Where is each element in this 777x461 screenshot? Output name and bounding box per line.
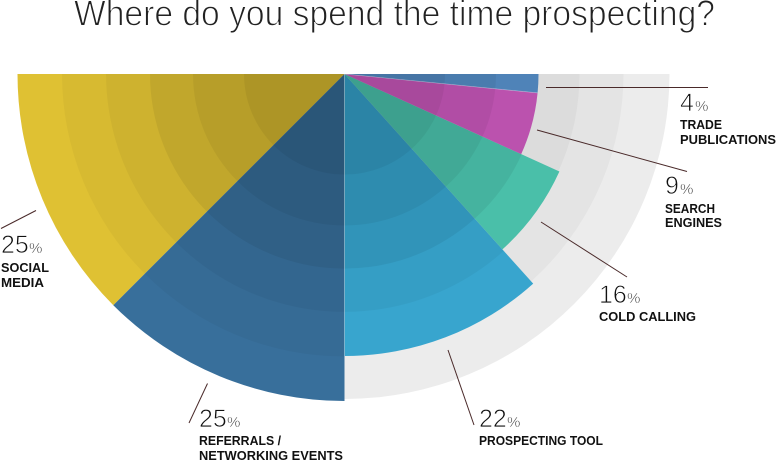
label: referrals / networking events [189, 384, 343, 461]
label: referrals / networking events: REFERRALS / [199, 434, 282, 448]
label: prospecting tool: PROSPECTING TOOL [479, 434, 603, 448]
label: social media: SOCIAL [1, 261, 49, 275]
label: referrals / networking events: 25 [199, 405, 227, 433]
label: prospecting tool: 22 [479, 405, 507, 433]
label: search engines: ENGINES [665, 216, 722, 230]
wedge: referrals / networking events [113, 74, 344, 401]
wedge: prospecting tool [344, 74, 533, 356]
label: cold calling: 16 [599, 281, 627, 309]
label: referrals / networking events: % [227, 414, 240, 431]
label: trade publications: PUBLICATIONS [680, 133, 776, 147]
label: search engines [537, 130, 722, 230]
concentric shading rings [62, 74, 522, 356]
label: cold calling [541, 222, 696, 324]
label: trade publications [546, 88, 776, 147]
wedge: search engines [344, 74, 538, 154]
background grey rings [344, 74, 670, 399]
label: social media: MEDIA [1, 276, 44, 290]
label: cold calling: % [627, 290, 640, 307]
label: search engines: 9 [665, 172, 679, 200]
wedge: social media [18, 74, 344, 305]
semicircle chart [18, 74, 670, 401]
label: search engines: % [680, 181, 693, 198]
label: social media: % [29, 240, 42, 257]
label: cold calling: COLD CALLING [599, 310, 696, 324]
label: social media [1, 210, 49, 290]
label: trade publications: % [695, 98, 708, 115]
wedge: trade publications [344, 74, 539, 93]
label: trade publications: 4 [680, 89, 694, 117]
label: social media: 25 [1, 231, 29, 259]
label: prospecting tool: % [507, 414, 520, 431]
label: search engines: SEARCH [665, 202, 715, 216]
wedge: cold calling [344, 74, 559, 249]
label: trade publications: TRADE [680, 118, 722, 132]
label: prospecting tool [448, 350, 603, 448]
